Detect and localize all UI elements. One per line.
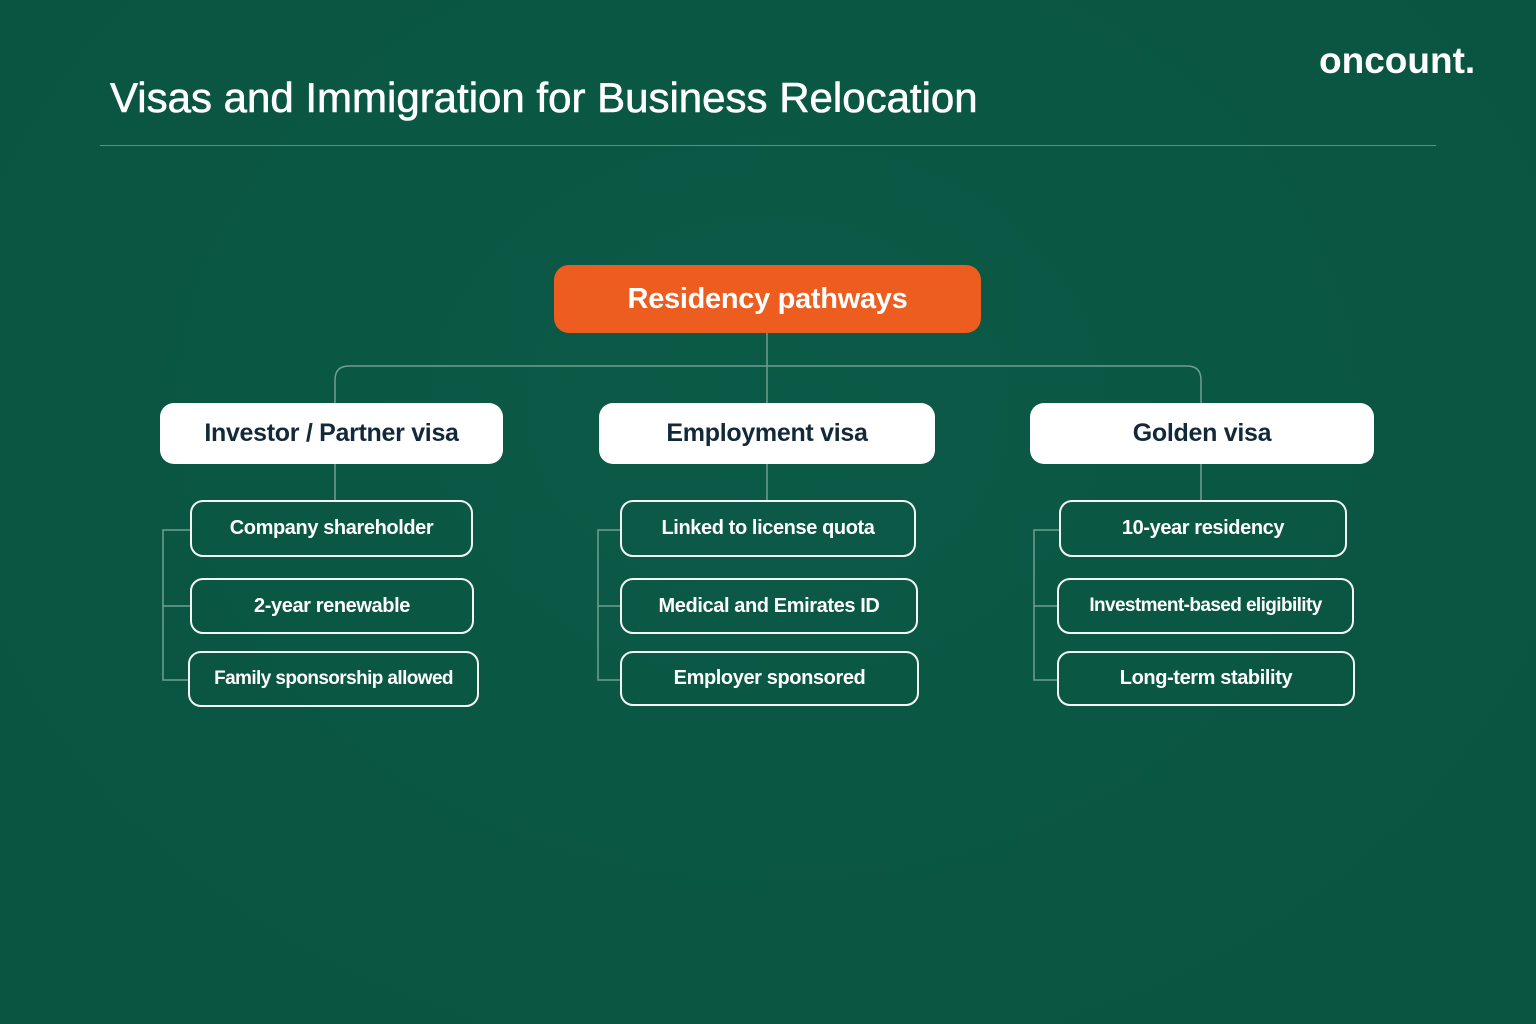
item: Investment-based eligibility xyxy=(1057,578,1354,634)
item: Medical and Emirates ID: Medical and Emirates ID xyxy=(659,594,879,616)
item: 10-year residency xyxy=(1059,500,1347,557)
item: 2-year renewable: 2-year renewable xyxy=(254,594,410,616)
header: Investor / Partner visa: Investor / Partner visa xyxy=(204,419,459,447)
item: Company shareholder: Company shareholder xyxy=(230,517,433,539)
item: Medical and Emirates ID xyxy=(620,578,918,634)
header: Golden visa xyxy=(1030,403,1374,464)
item: Long-term stability xyxy=(1057,651,1355,706)
item: Family sponsorship allowed: Family sponsorship allowed xyxy=(214,668,453,689)
header: Investor / Partner visa xyxy=(160,403,503,464)
item: Investment-based eligibility: Investment-based eligibility xyxy=(1089,595,1322,616)
root node: Residency pathways: Residency pathways xyxy=(628,282,907,314)
root node: Residency pathways xyxy=(554,265,981,333)
header: Golden visa: Golden visa xyxy=(1133,419,1271,447)
item: Linked to license quota xyxy=(620,500,916,557)
item: Employer sponsored: Employer sponsored xyxy=(674,667,865,689)
item: Company shareholder xyxy=(190,500,473,557)
header: Employment visa: Employment visa xyxy=(666,419,868,447)
item: Employer sponsored xyxy=(620,651,919,706)
title: Visas and Immigration for Business Relocation xyxy=(110,74,978,121)
item: 10-year residency: 10-year residency xyxy=(1122,517,1284,539)
item: Long-term stability: Long-term stability xyxy=(1120,667,1292,689)
item: Linked to license quota: Linked to license quota xyxy=(661,517,875,539)
item: Family sponsorship allowed xyxy=(188,651,479,707)
logo: oncount. xyxy=(1319,40,1475,81)
item: 2-year renewable xyxy=(190,578,474,634)
header: Employment visa xyxy=(599,403,935,464)
